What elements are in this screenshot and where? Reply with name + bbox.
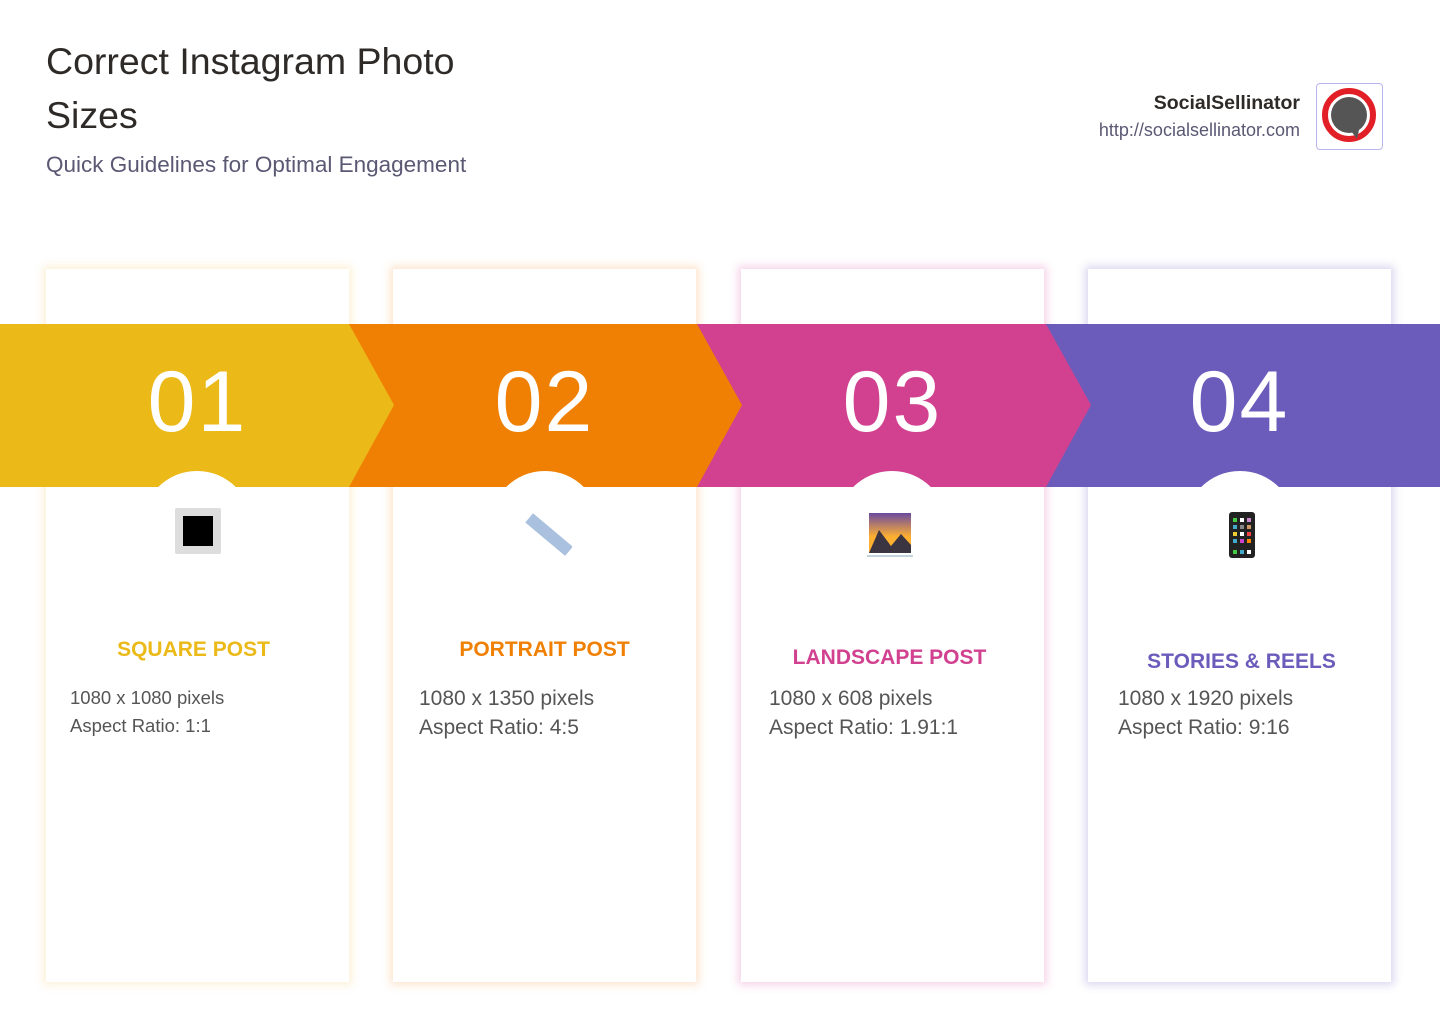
- subtitle: Quick Guidelines for Optimal Engagement: [46, 152, 466, 177]
- texts: [70, 687, 224, 736]
- logo: [1316, 83, 1383, 150]
- icon: landscape: [867, 513, 913, 556]
- cards: [46, 269, 349, 982]
- texts: Aspect Ratio: 1:1: [70, 715, 211, 736]
- icon: ruler: [525, 513, 572, 556]
- text: STORIES & REELS: [1147, 650, 1336, 673]
- text: LANDSCAPE POST: [793, 646, 986, 669]
- labels: SQUARE POST: [117, 638, 270, 661]
- text: 1080 x 608 pixels: [769, 687, 932, 710]
- text: Aspect Ratio: 1.91:1: [769, 716, 958, 739]
- text: 1080 x 1350 pixels: [419, 687, 594, 710]
- numbers: 01: [148, 354, 247, 450]
- text: 04: [1190, 354, 1289, 450]
- icon: phone: [1229, 512, 1255, 558]
- text: Aspect Ratio: 9:16: [1118, 716, 1290, 739]
- text: PORTRAIT POST: [459, 638, 630, 661]
- text: 03: [843, 354, 942, 450]
- title: [46, 40, 455, 136]
- text: Aspect Ratio: 4:5: [419, 716, 579, 739]
- texts: 1080 x 1080 pixels: [70, 687, 224, 708]
- brand text: http://socialsellinator.com: [1099, 120, 1300, 140]
- brand text: SocialSellinator: [1154, 92, 1300, 114]
- icon: square: [175, 508, 221, 554]
- title: Correct Instagram Photo: [46, 40, 455, 82]
- title: Sizes: [46, 94, 138, 136]
- arrow band: [0, 324, 1440, 487]
- text: 1080 x 1920 pixels: [1118, 687, 1293, 710]
- brand text: [1099, 92, 1300, 140]
- text: 02: [495, 354, 594, 450]
